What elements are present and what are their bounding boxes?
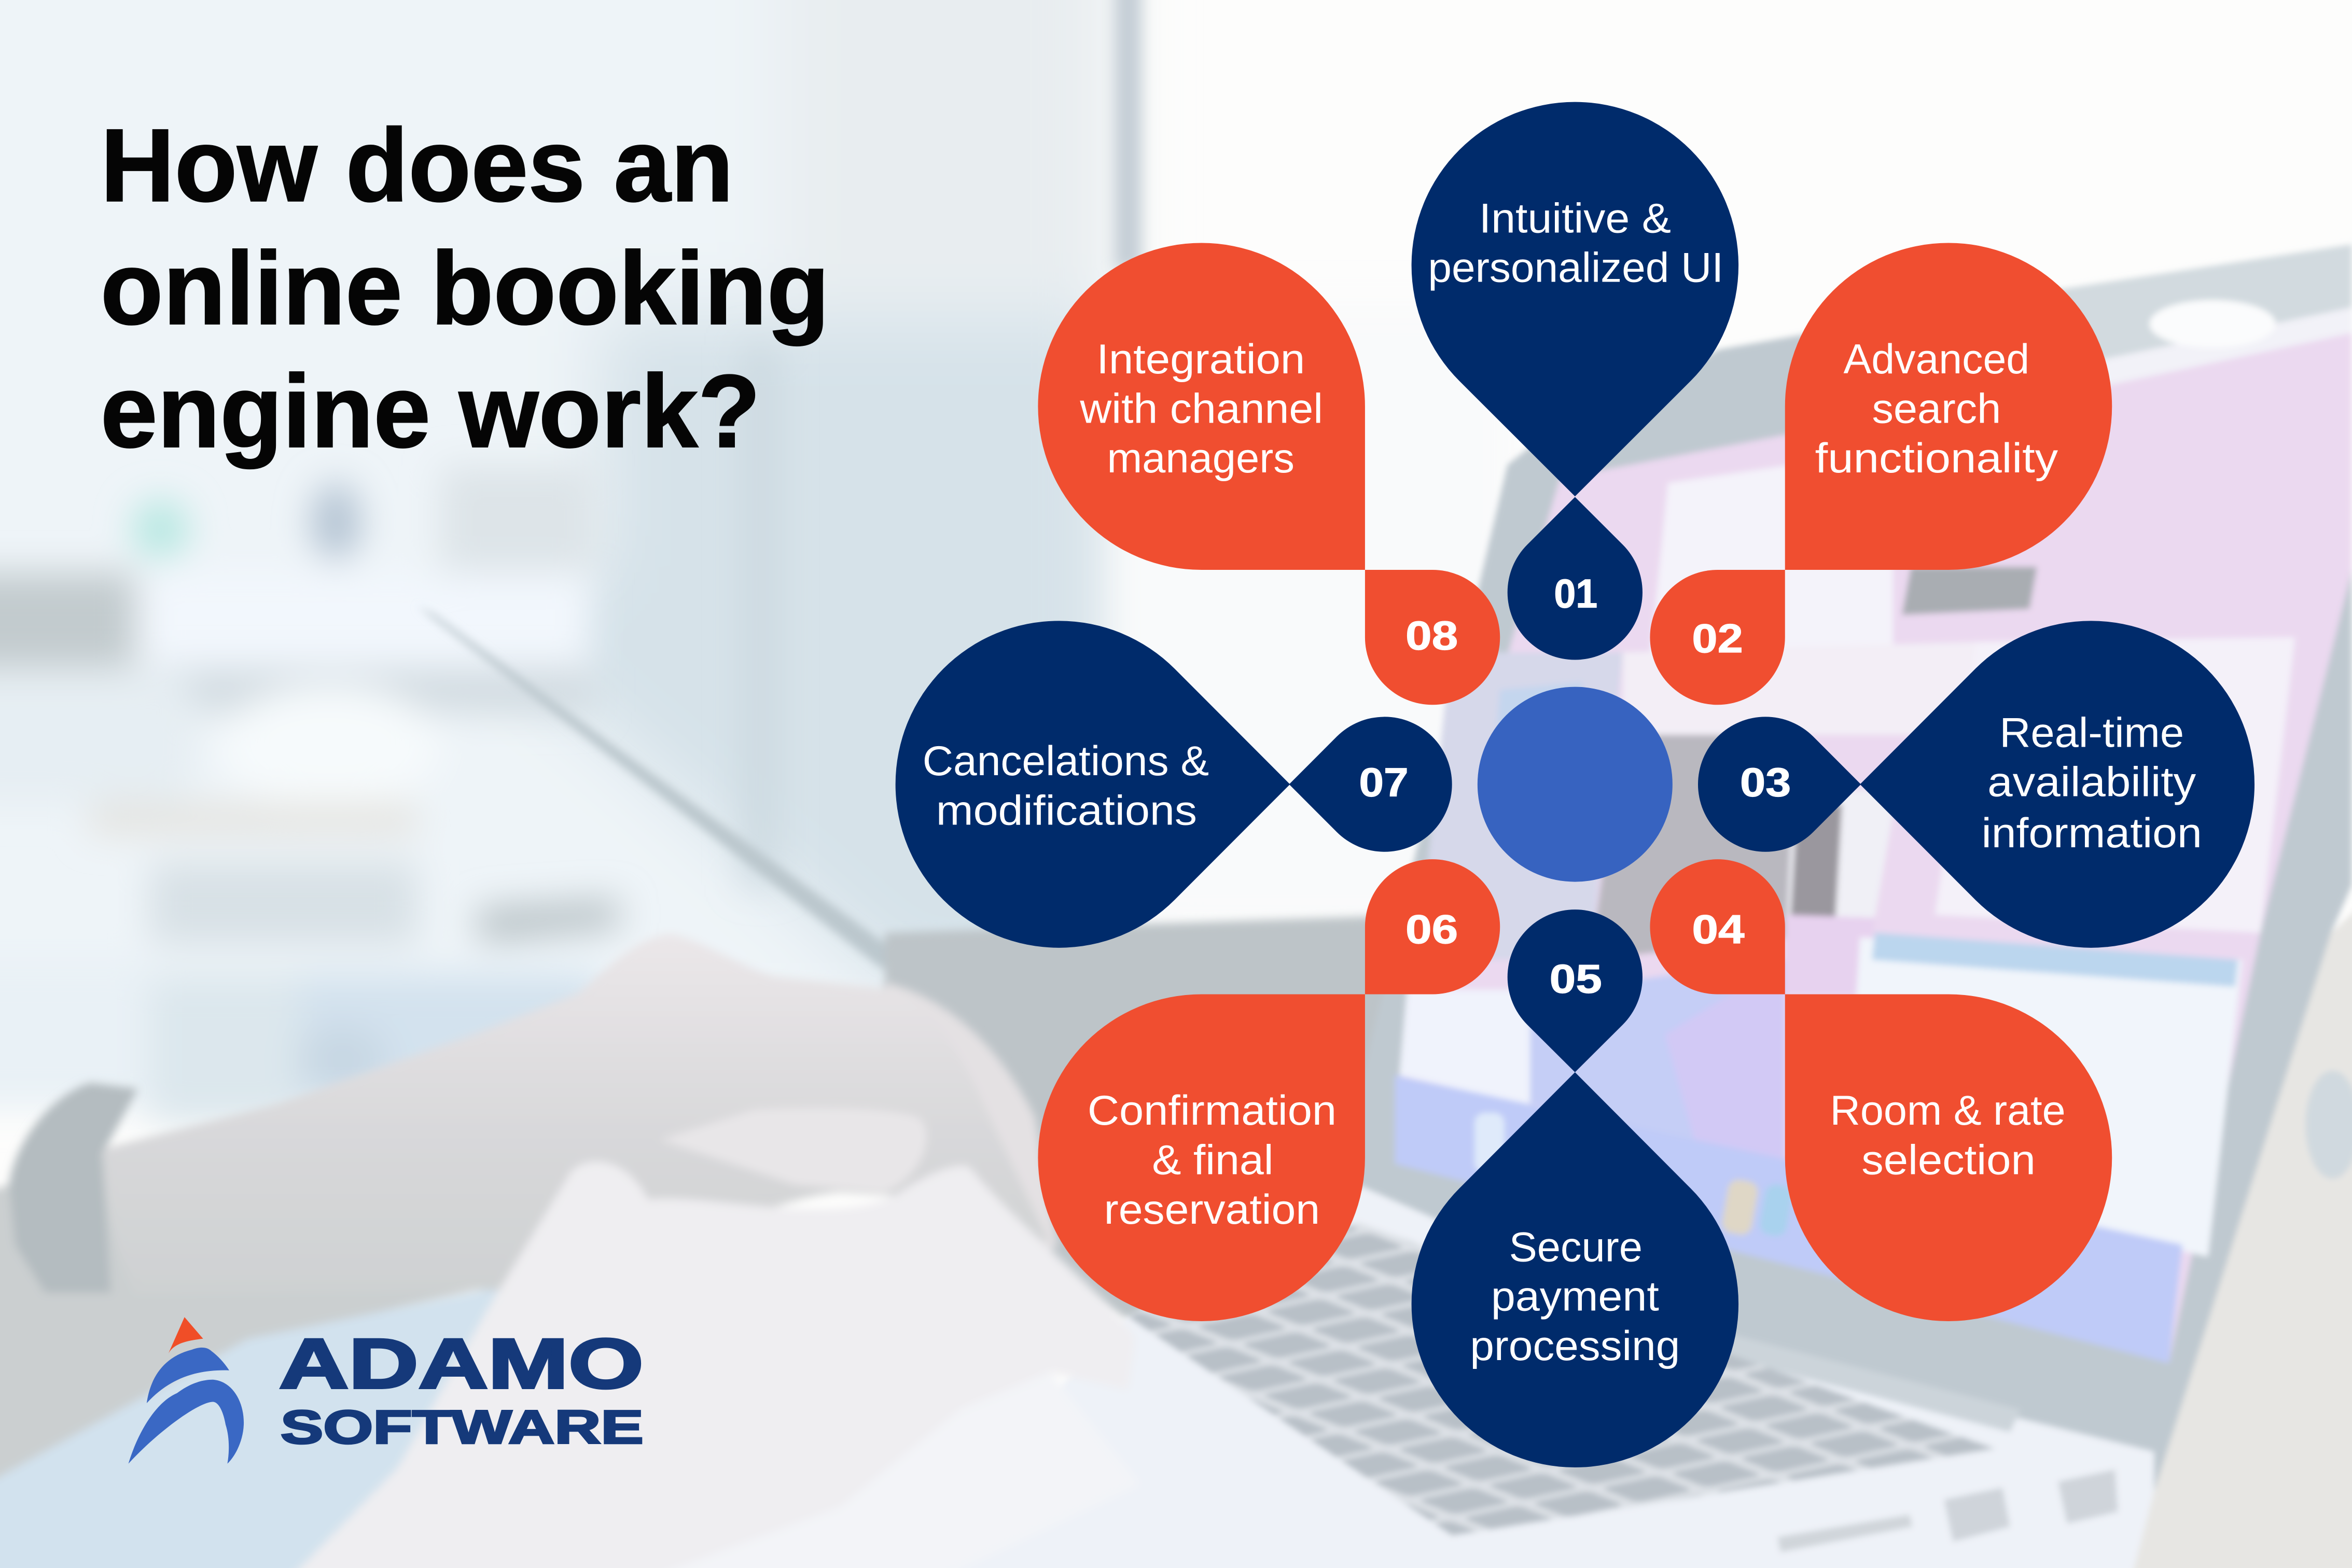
step 07: Cancelations & modifications bbox=[896, 621, 1452, 948]
step 05: Secure payment processing: Secure bbox=[1509, 1224, 1643, 1270]
step 02: Advanced search functionality: 02 bbox=[1692, 615, 1743, 661]
far finger bbox=[885, 982, 1057, 1275]
step 02: Advanced search functionality: Advanced bbox=[1844, 336, 2029, 383]
step 03: Real-time availability information: 03 bbox=[1740, 760, 1791, 805]
step 06: Confirmation & final reservation bbox=[1038, 859, 1500, 1321]
step 08: Integration with channel managers bbox=[1038, 243, 1500, 705]
title bbox=[101, 108, 829, 469]
step 08: Integration with channel managers: with channel bbox=[1079, 386, 1323, 432]
icon: rocket mark bbox=[129, 1317, 244, 1464]
step 04: Room & rate selection bbox=[1650, 859, 2112, 1321]
lower hand bbox=[285, 1161, 1135, 1568]
step 06: Confirmation & final reservation: Confirmation bbox=[1088, 1087, 1337, 1134]
step 05: Secure payment processing: processing bbox=[1470, 1323, 1680, 1369]
step 07: Cancelations & modifications: modifications bbox=[936, 788, 1197, 834]
step 03: Real-time availability information: availability bbox=[1987, 759, 2196, 806]
title: How does an bbox=[101, 108, 733, 223]
wordmark: SOFTWARE bbox=[281, 1402, 644, 1454]
step 02: Advanced search functionality bbox=[1650, 243, 2112, 705]
wordmark: ADAMO bbox=[279, 1324, 644, 1403]
logo: Adamo Software bbox=[129, 1317, 644, 1464]
laptop corner bottom left bbox=[0, 1286, 503, 1568]
dock icons bbox=[1474, 1113, 1505, 1173]
step 05: Secure payment processing: payment bbox=[1491, 1273, 1659, 1320]
step 06: Confirmation & final reservation: & final bbox=[1152, 1137, 1273, 1184]
left arm shadow bbox=[0, 1155, 510, 1485]
step 04: Room & rate selection: Room & rate bbox=[1830, 1087, 2066, 1134]
thumb bbox=[660, 1108, 927, 1192]
step 01: Intuitive & personalized UI: 01 bbox=[1554, 570, 1597, 616]
step 02: Advanced search functionality: search bbox=[1872, 386, 2001, 432]
laptop deck bbox=[870, 1185, 2154, 1568]
step 08: Integration with channel managers: Integration bbox=[1096, 336, 1305, 383]
step 03: Real-time availability information: information bbox=[1982, 810, 2202, 857]
keyboard bbox=[1128, 1222, 1995, 1536]
laptop lid bbox=[1350, 244, 2352, 1492]
step 07: Cancelations & modifications: Cancelations & bbox=[923, 738, 1209, 785]
watch bbox=[9, 1083, 138, 1293]
desk right bbox=[2115, 900, 2352, 1568]
step 06: Confirmation & final reservation: 06 bbox=[1405, 906, 1458, 952]
step 04: Room & rate selection: selection bbox=[1861, 1137, 2036, 1184]
step 01: Intuitive & personalized UI: personalized UI bbox=[1428, 245, 1723, 291]
wordmark bbox=[279, 1324, 644, 1454]
step 01: Intuitive & personalized UI: Intuitive & bbox=[1479, 195, 1671, 242]
step 08: Integration with channel managers: managers bbox=[1107, 435, 1295, 482]
step 06: Confirmation & final reservation: reservation bbox=[1104, 1186, 1320, 1233]
step 02: Advanced search functionality: functionality bbox=[1815, 435, 2058, 482]
upper hand bbox=[104, 934, 1050, 1294]
step 01: Intuitive & personalized UI bbox=[1412, 102, 1738, 660]
title: online booking bbox=[101, 231, 829, 346]
step 03: Real-time availability information: Real-time bbox=[1999, 709, 2184, 756]
step 05: Secure payment processing bbox=[1412, 909, 1738, 1467]
center circle bbox=[1478, 687, 1673, 882]
title: engine work? bbox=[101, 354, 760, 469]
step 07: Cancelations & modifications: 07 bbox=[1359, 760, 1409, 805]
step 05: Secure payment processing: 05 bbox=[1550, 956, 1602, 1002]
step 03: Real-time availability information bbox=[1698, 621, 2254, 948]
step 08: Integration with channel managers: 08 bbox=[1405, 612, 1458, 658]
step 04: Room & rate selection: 04 bbox=[1692, 906, 1745, 952]
